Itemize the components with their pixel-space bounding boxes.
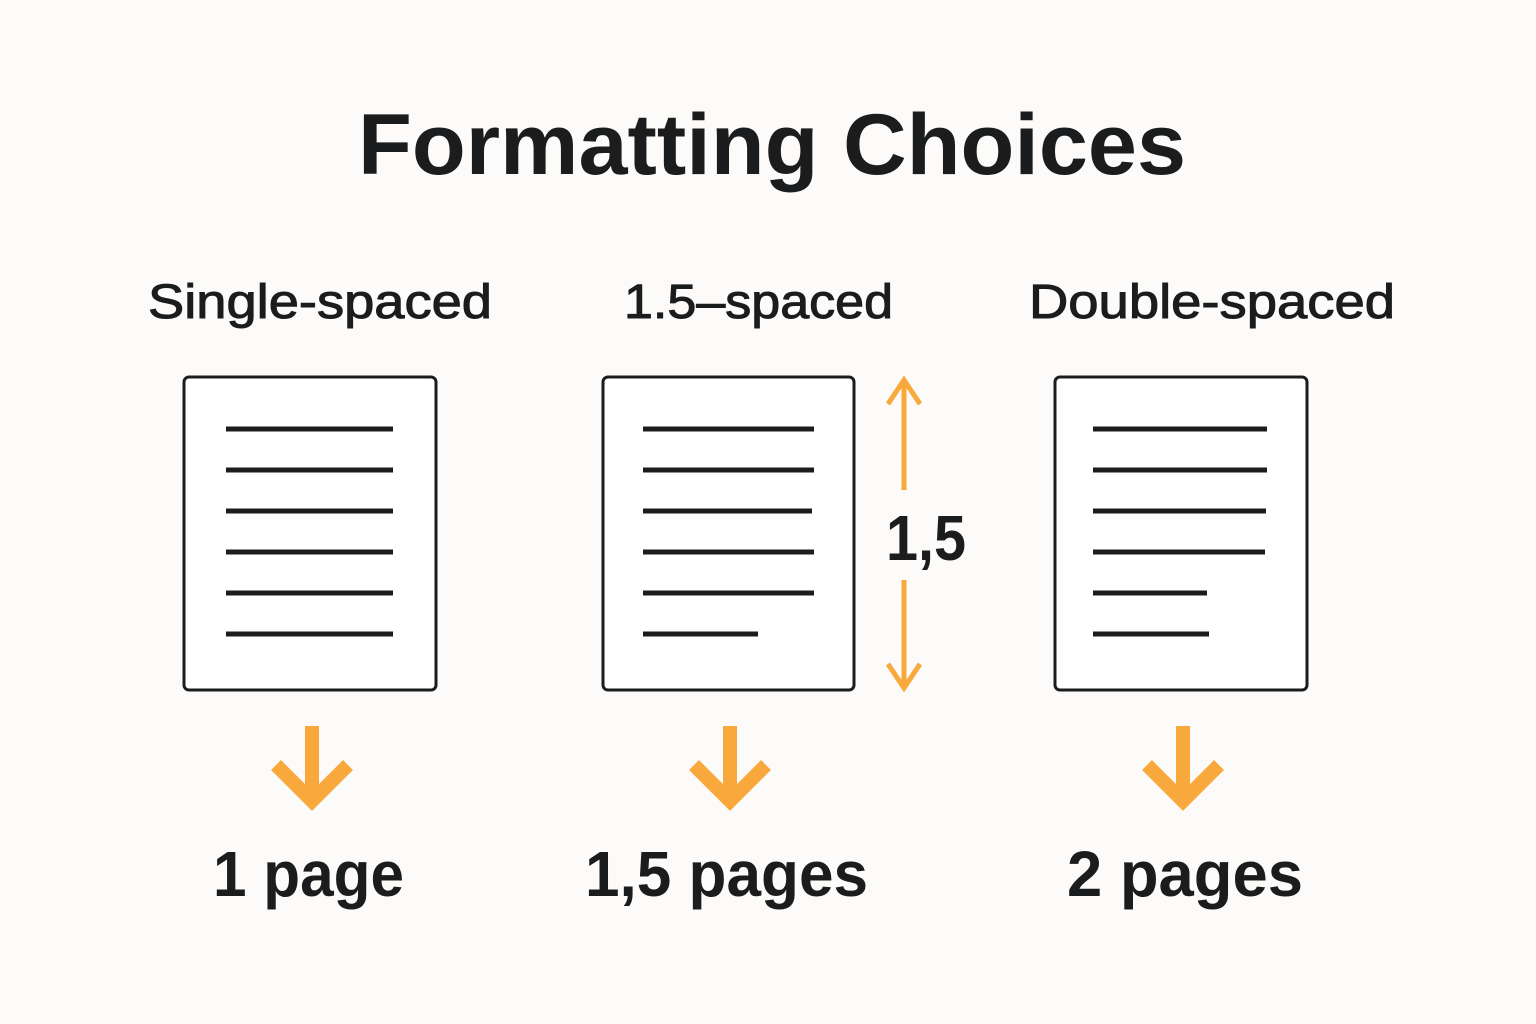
label: 1,5: 1,5 — [886, 502, 966, 574]
panel: single-spaced — [148, 276, 492, 910]
heading: double-spaced: Double-spaced — [1029, 276, 1395, 329]
panel: 1.5-spaced — [585, 276, 966, 910]
result: 1 page: 1 page — [213, 838, 404, 910]
result: 2 pages: 2 pages — [1067, 838, 1303, 910]
icon: document double — [1055, 377, 1307, 690]
panel: double-spaced — [1029, 276, 1395, 910]
arrow: spacing indicator — [888, 380, 920, 688]
arrow: down single — [276, 726, 348, 801]
heading: 1.5-spaced: 1.5–spaced — [624, 276, 893, 329]
arrow: down 1.5 — [694, 726, 766, 801]
icon: document 1.5 — [603, 377, 854, 690]
result: 1,5 pages: 1,5 pages — [585, 838, 868, 910]
heading: single-spaced: Single-spaced — [148, 276, 492, 329]
arrow: down double — [1147, 726, 1219, 801]
icon: document single — [184, 377, 436, 690]
title: Formatting Choices — [358, 97, 1186, 193]
